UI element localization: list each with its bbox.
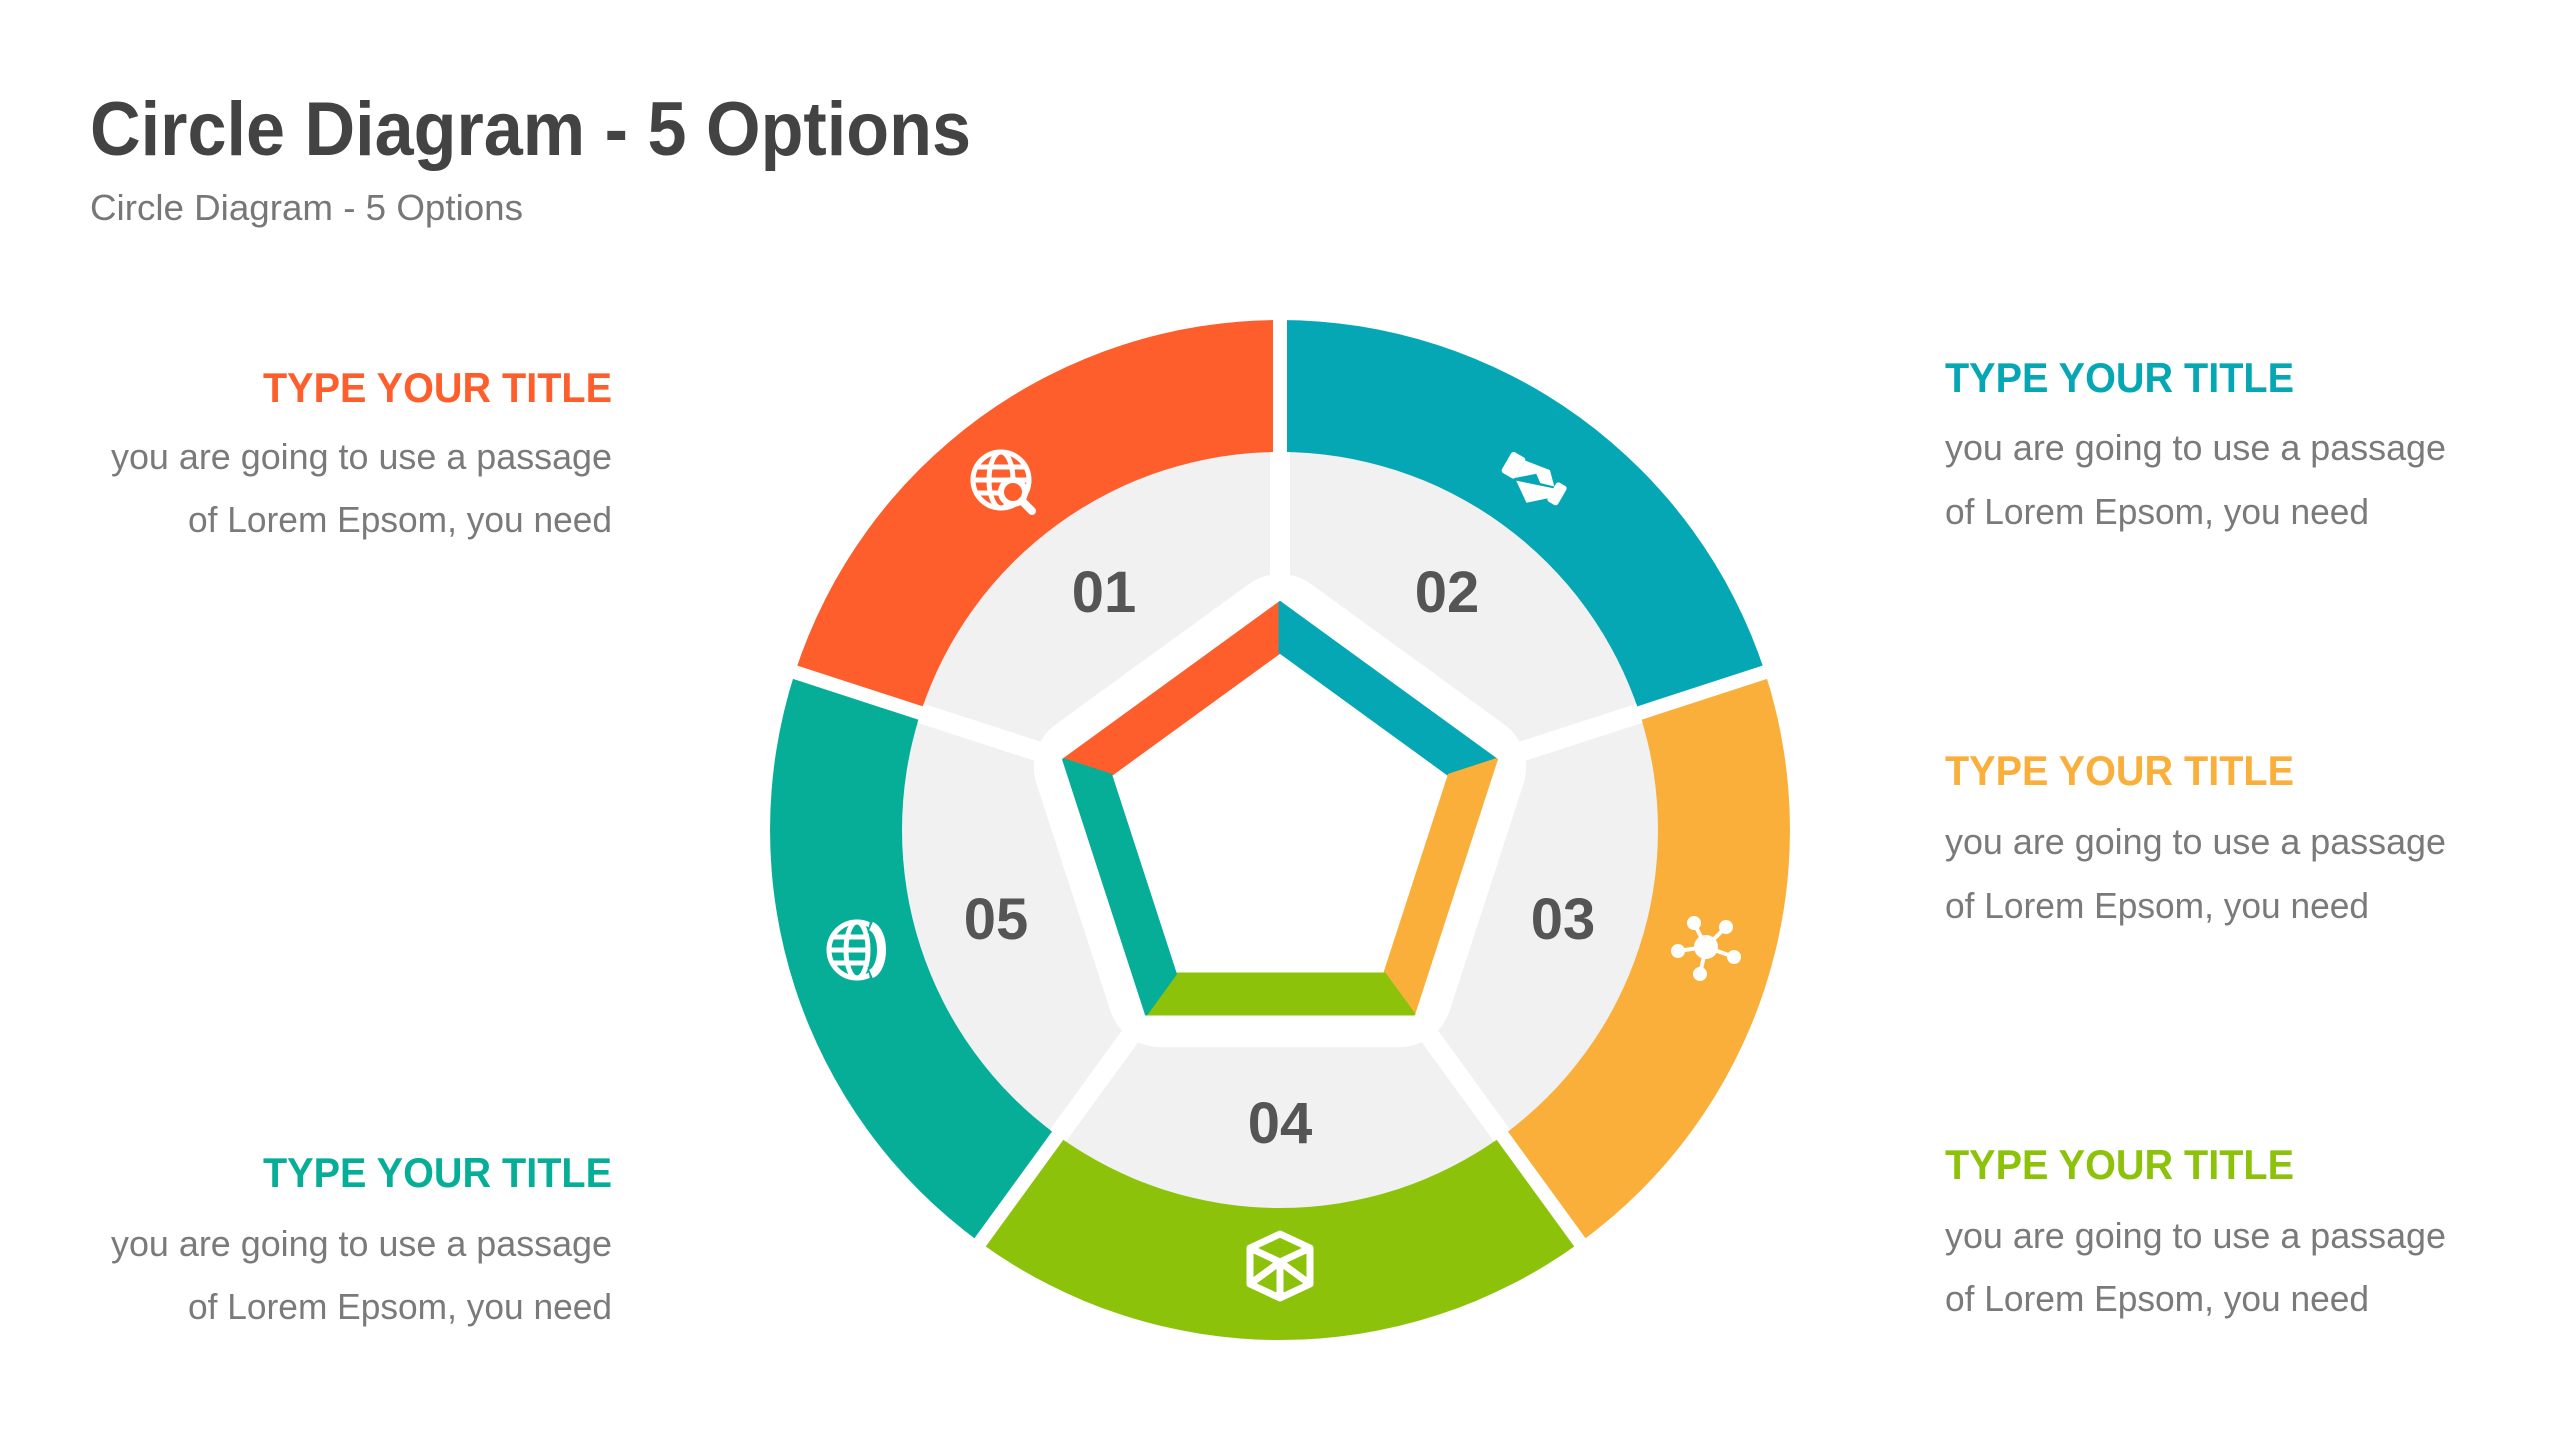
text block: option 01: of Lorem Epsom, you need bbox=[188, 499, 612, 540]
text block: option 04: of Lorem Epsom, you need bbox=[1945, 1278, 2369, 1319]
text block: option 01: TYPE YOUR TITLE bbox=[263, 364, 612, 411]
text block: option 05 bbox=[111, 1149, 612, 1327]
text block: option 03: TYPE YOUR TITLE bbox=[1945, 747, 2294, 794]
text block: option 02: of Lorem Epsom, you need bbox=[1945, 491, 2369, 532]
text block: option 03: you are going to use a passage bbox=[1945, 821, 2446, 862]
text block: option 04: TYPE YOUR TITLE bbox=[1945, 1141, 2294, 1188]
gray inner disc bbox=[900, 450, 1660, 1210]
text block: option 03: of Lorem Epsom, you need bbox=[1945, 885, 2369, 926]
text block: option 02: you are going to use a passage bbox=[1945, 427, 2446, 468]
text block: option 05: you are going to use a passage bbox=[111, 1223, 612, 1264]
ring segment 02 bbox=[1280, 320, 1765, 713]
text block: option 04 bbox=[1945, 1141, 2446, 1319]
numbers bbox=[964, 560, 1595, 1156]
white pentagon gap bbox=[1087, 627, 1473, 994]
numbers: 05 bbox=[964, 887, 1028, 952]
ring segment 03 bbox=[1502, 672, 1790, 1243]
text block: option 01: you are going to use a passage bbox=[111, 436, 612, 477]
text block: option 03 bbox=[1945, 747, 2446, 926]
numbers: 04 bbox=[1248, 1091, 1312, 1156]
numbers: 03 bbox=[1531, 887, 1595, 952]
ring segment 04 bbox=[980, 1136, 1580, 1340]
pentagon band bbox=[1064, 603, 1496, 1014]
text block: option 02: TYPE YOUR TITLE bbox=[1945, 354, 2294, 401]
ring segment 01 bbox=[795, 320, 1280, 713]
icon: globe phone bbox=[829, 922, 885, 978]
text block: option 05: TYPE YOUR TITLE bbox=[263, 1149, 612, 1196]
numbers: 02 bbox=[1415, 560, 1479, 625]
numbers: 01 bbox=[1072, 560, 1136, 625]
icon: handshake bbox=[1494, 449, 1571, 517]
subtitle: Circle Diagram - 5 Options bbox=[90, 187, 523, 228]
ring segment 05 bbox=[770, 672, 1058, 1243]
text block: option 05: of Lorem Epsom, you need bbox=[188, 1286, 612, 1327]
title: Circle Diagram - 5 Options bbox=[90, 87, 971, 172]
text block: option 02 bbox=[1945, 354, 2446, 532]
text block: option 01 bbox=[111, 364, 612, 540]
circle diagram bbox=[770, 300, 1790, 1340]
icon: globe search bbox=[973, 452, 1032, 511]
text block: option 04: you are going to use a passage bbox=[1945, 1215, 2446, 1256]
icon: cube bbox=[1250, 1234, 1310, 1298]
icon: network bbox=[1673, 918, 1739, 979]
